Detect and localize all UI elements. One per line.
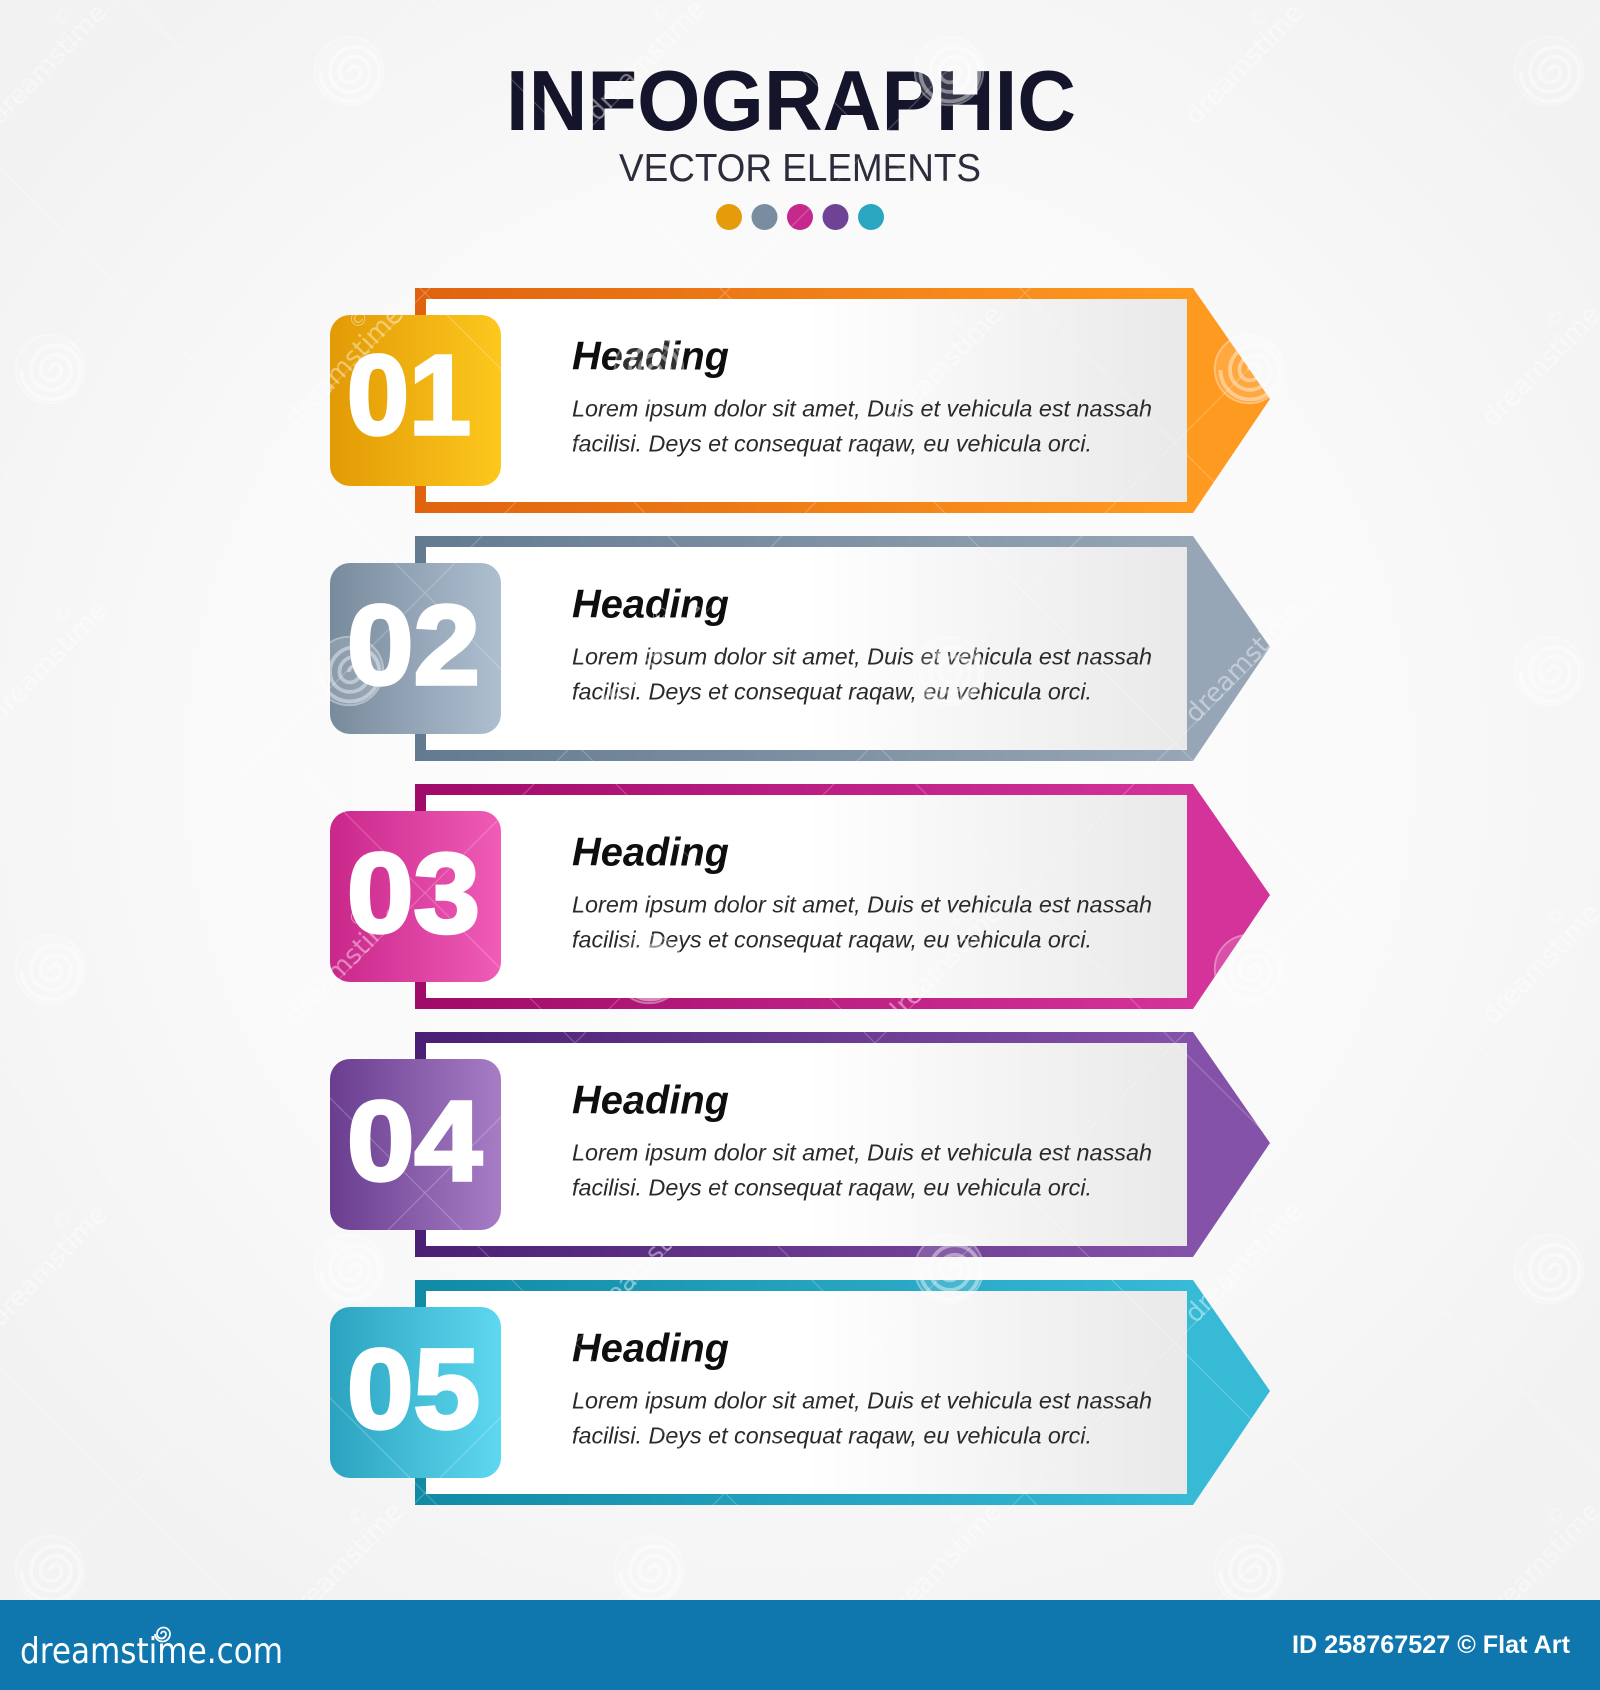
watermark text: dreamstime <box>279 1497 409 1630</box>
watermark text: dreamstime <box>279 300 409 433</box>
body text 03: facilisi. Deys et consequat raqaw, eu vehicula orci. <box>572 926 1092 952</box>
title: INFOGRAPHIC <box>506 54 1076 149</box>
body text 04: Lorem ipsum dolor sit amet, Duis et vehicula est nassah <box>572 1140 1152 1166</box>
watermark text: © <box>343 901 374 932</box>
watermark text: dreamstime <box>1179 596 1309 729</box>
heading 01: Heading <box>572 334 729 378</box>
body text 03 <box>572 892 1152 952</box>
watermark text: © <box>1243 1199 1274 1230</box>
watermark text: © <box>645 1199 676 1230</box>
number badge 02: 02 <box>347 582 480 708</box>
title block <box>506 54 1076 230</box>
panel: step 02 <box>330 536 1270 761</box>
subtitle: VECTOR ELEMENTS <box>619 147 981 190</box>
watermark text: dreamstime <box>878 898 1008 1031</box>
watermark text: dreamstime <box>878 300 1008 433</box>
body text 02: facilisi. Deys et consequat raqaw, eu vehicula orci. <box>572 678 1092 704</box>
watermark text: dreamstime <box>1179 1196 1309 1329</box>
number badge 05 <box>330 1307 501 1478</box>
number badge 03 <box>330 811 501 982</box>
number badge 04 <box>330 1059 501 1230</box>
watermark text: © <box>942 303 973 334</box>
body text 01 <box>572 396 1152 456</box>
arrow frame 05 <box>415 1280 1270 1505</box>
body text 05: Lorem ipsum dolor sit amet, Duis et vehicula est nassah <box>572 1388 1152 1414</box>
watermark text: dreamstime <box>1179 0 1309 131</box>
watermark text: © <box>1243 1 1274 32</box>
watermark text: © <box>1540 1500 1571 1531</box>
content box 04 <box>426 1043 1187 1246</box>
arrow frame 02 <box>415 536 1270 761</box>
body text 02 <box>572 644 1152 704</box>
arrow frame 03 <box>415 784 1270 1009</box>
number badge 05: 05 <box>347 1326 480 1452</box>
body text 05: facilisi. Deys et consequat raqaw, eu vehicula orci. <box>572 1422 1092 1448</box>
heading 02: Heading <box>572 582 729 626</box>
colour dots <box>716 204 884 230</box>
panel: step 03 <box>330 784 1270 1009</box>
body text 02: Lorem ipsum dolor sit amet, Duis et vehicula est nassah <box>572 644 1152 670</box>
watermark text: © <box>343 303 374 334</box>
heading 04: Heading <box>572 1078 729 1122</box>
panel: step 04 <box>330 1032 1270 1257</box>
watermark text: © <box>1540 901 1571 932</box>
watermark text: © <box>1540 303 1571 334</box>
panel: step 01 <box>330 288 1270 513</box>
watermark text: © <box>47 1 78 32</box>
watermark text: dreamstime <box>279 898 409 1031</box>
watermark text: dreamstime <box>878 1497 1008 1630</box>
watermark text: © <box>645 599 676 630</box>
arrow frame 04 <box>415 1032 1270 1257</box>
number badge 04: 04 <box>347 1078 482 1204</box>
content box 03 <box>426 795 1187 998</box>
body text 05 <box>572 1388 1152 1448</box>
footer band <box>0 1600 1600 1690</box>
number badge 03: 03 <box>347 830 480 956</box>
number badge 01: 01 <box>347 332 471 458</box>
number badge 01 <box>330 315 501 486</box>
watermark text: © <box>1243 599 1274 630</box>
footer image id and credit: ID 258767527 © Flat Art <box>1292 1631 1571 1659</box>
body text 03: Lorem ipsum dolor sit amet, Duis et vehicula est nassah <box>572 892 1152 918</box>
footer logo text: dreamstime.com <box>20 1631 283 1672</box>
content box 05 <box>426 1291 1187 1494</box>
watermark text: © <box>942 901 973 932</box>
icon: logo spiral <box>155 1628 170 1642</box>
watermark text: © <box>942 1500 973 1531</box>
watermark text: dreamstime <box>581 1196 711 1329</box>
content box 02 <box>426 547 1187 750</box>
watermark text: © <box>343 1500 374 1531</box>
watermark text: © <box>47 1203 78 1234</box>
watermark text: © <box>47 599 78 630</box>
arrow frame 01 <box>415 288 1270 513</box>
body text 01: Lorem ipsum dolor sit amet, Duis et vehicula est nassah <box>572 396 1152 422</box>
heading 03: Heading <box>572 830 729 874</box>
heading 05: Heading <box>572 1326 729 1370</box>
watermark text: dreamstime <box>581 596 711 729</box>
body text 01: facilisi. Deys et consequat raqaw, eu vehicula orci. <box>572 430 1092 456</box>
panel: step 05 <box>330 1280 1270 1505</box>
content box 01 <box>426 299 1187 502</box>
body text 04: facilisi. Deys et consequat raqaw, eu vehicula orci. <box>572 1174 1092 1200</box>
body text 04 <box>572 1140 1152 1200</box>
number badge 02 <box>330 563 501 734</box>
